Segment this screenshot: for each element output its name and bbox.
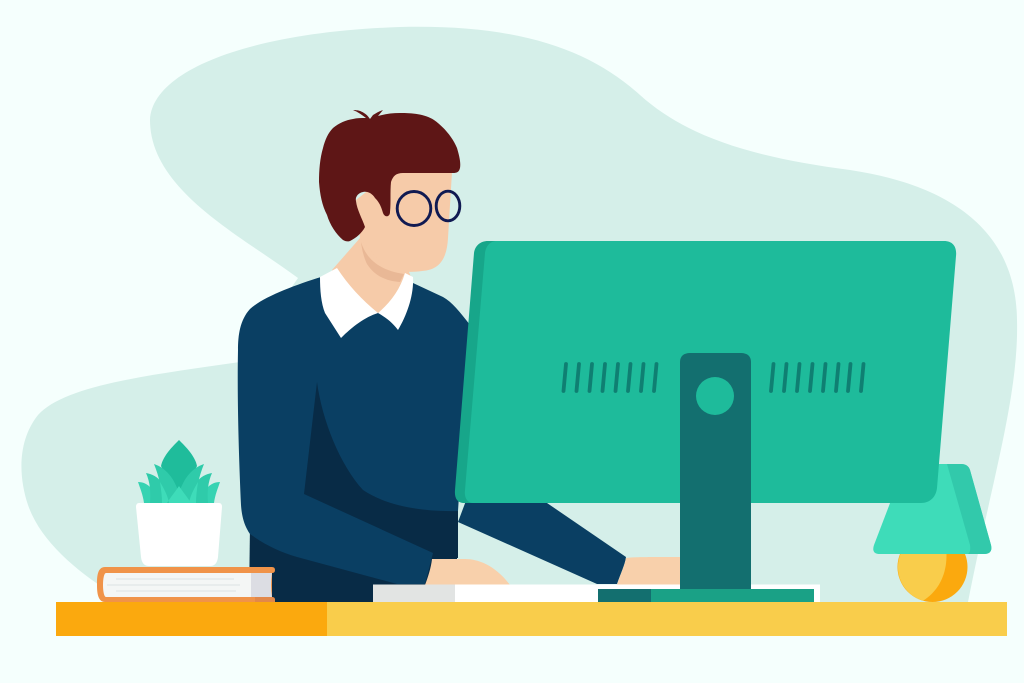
screen back xyxy=(465,241,956,503)
stand base xyxy=(598,589,814,602)
icon: potted plant xyxy=(136,440,222,566)
stand button xyxy=(696,377,734,415)
collar xyxy=(320,268,413,338)
hair xyxy=(319,110,460,241)
near hand xyxy=(425,559,510,585)
desk xyxy=(56,602,1007,636)
glasses xyxy=(397,191,460,226)
sweater shadow xyxy=(304,382,458,558)
far hand xyxy=(617,557,681,585)
icon: lamp xyxy=(873,464,991,602)
vents right xyxy=(771,364,864,391)
vents left xyxy=(564,364,656,391)
jaw shadow xyxy=(361,242,404,282)
neck xyxy=(332,230,411,313)
man: lower body xyxy=(249,480,457,602)
screen edge xyxy=(455,241,600,503)
far arm xyxy=(458,490,626,584)
monitor xyxy=(455,241,956,602)
stand xyxy=(680,353,751,589)
icon: book xyxy=(97,567,275,602)
keyboard xyxy=(373,584,820,602)
sweater with near arm xyxy=(238,277,470,584)
face xyxy=(356,172,452,272)
man: head xyxy=(319,110,460,338)
